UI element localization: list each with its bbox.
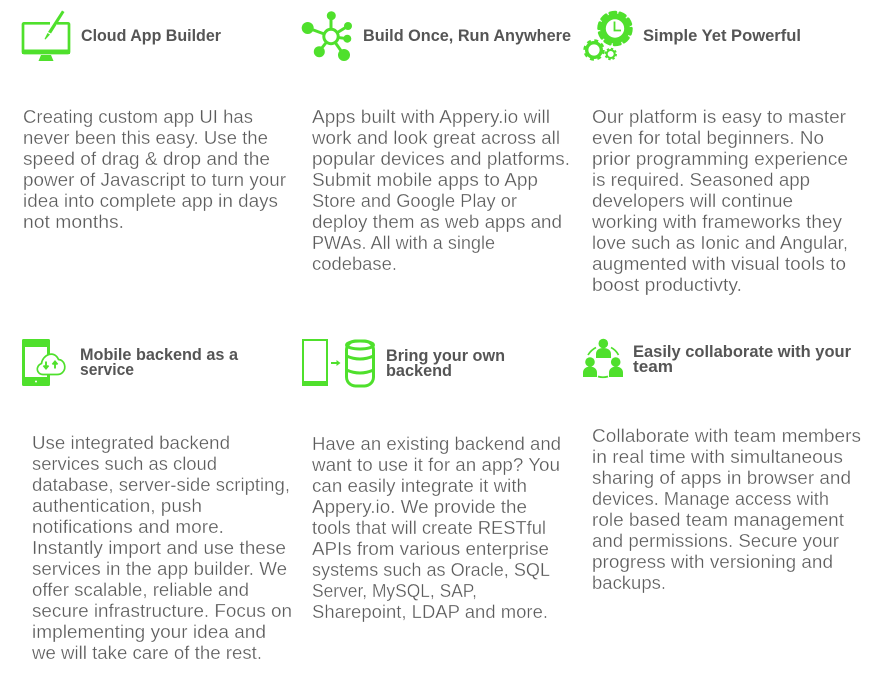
text: cloud app builder description: power of Javascript to turn your <box>23 169 286 190</box>
text: build once description: Submit mobile apps to App <box>312 169 538 190</box>
text: simple yet powerful description: boost productivty. <box>592 274 742 295</box>
text: collaborate description <box>592 425 861 593</box>
text: collaborate description: devices. Manage access with <box>592 488 829 509</box>
heading: Mobile backend as a service: Mobile backend as a <box>80 346 239 364</box>
heading: Mobile backend as a service: service <box>80 361 134 379</box>
text: mobile backend description: secure infrastructure. Focus on <box>32 600 292 621</box>
text: bring your own backend description: Server, MySQL, SAP, <box>312 580 477 601</box>
heading: Mobile backend as a service <box>80 346 239 379</box>
text: simple yet powerful description: augmented with visual tools to <box>592 253 846 274</box>
icon: network hub <box>302 11 352 61</box>
heading: Cloud App Builder: Cloud App Builder <box>81 27 222 45</box>
text: mobile backend description: Use integrated backend <box>32 432 230 453</box>
text: bring your own backend description: Sharepoint, LDAP and more. <box>312 601 548 622</box>
heading: Simple Yet Powerful: Simple Yet Powerful <box>643 27 801 45</box>
text: mobile backend description: notifications and more. <box>32 516 224 537</box>
text: bring your own backend description: can easily integrate it with <box>312 475 527 496</box>
text: collaborate description: backups. <box>592 572 666 593</box>
text: simple yet powerful description: is required. Seasoned app <box>592 169 810 190</box>
heading: Easily collaborate with your team: team <box>633 358 673 376</box>
text: collaborate description: in real time with simultaneous <box>592 446 843 467</box>
text: build once description: codebase. <box>312 253 397 274</box>
text: mobile backend description <box>31 432 292 663</box>
text: mobile backend description: services in the app builder. We <box>32 558 287 579</box>
text: cloud app builder description: speed of drag & drop and the <box>23 148 270 169</box>
text: build once description: Store and Google Play or <box>312 190 517 211</box>
heading: Easily collaborate with your team: Easily collaborate with your <box>633 343 852 361</box>
text: mobile backend description: Instantly import and use these <box>32 537 286 558</box>
heading: Easily collaborate with your team <box>633 343 852 376</box>
text: build once description: deploy them as web apps and <box>312 211 562 232</box>
text: build once description: popular devices and platforms. <box>312 148 570 169</box>
heading: Bring your own backend <box>386 347 505 380</box>
text: simple yet powerful description: love such as Ionic and Angular, <box>592 232 848 253</box>
text: collaborate description: Collaborate with team members <box>592 425 861 446</box>
text: cloud app builder description: Creating custom app UI has <box>23 106 253 127</box>
text: bring your own backend description: Appery.io. We provide the <box>312 496 527 517</box>
text: simple yet powerful description: working with frameworks they <box>591 211 843 232</box>
text: simple yet powerful description: prior programming experience <box>592 148 848 169</box>
text: bring your own backend description: systems such as Oracle, SQL <box>312 559 550 580</box>
text: simple yet powerful description: even for total beginners. No <box>592 127 824 148</box>
text: mobile backend description: implementing your idea and <box>32 621 266 642</box>
text: mobile backend description: services such as cloud <box>32 453 217 474</box>
text: mobile backend description: we will take care of the rest. <box>31 642 262 663</box>
text: mobile backend description: offer scalable, reliable and <box>32 579 249 600</box>
heading: Bring your own backend: Bring your own <box>386 347 505 365</box>
text: collaborate description: role based team management <box>592 509 844 530</box>
icon: phone with cloud <box>22 339 65 386</box>
text: build once description <box>311 106 570 274</box>
text: bring your own backend description <box>311 433 561 622</box>
text: mobile backend description: database, server-side scripting, <box>32 474 290 495</box>
text: cloud app builder description: never been this easy. Use the <box>23 127 268 148</box>
text: bring your own backend description: want to use it for an app? You <box>311 454 560 475</box>
text: cloud app builder description: not months. <box>23 211 124 232</box>
text: build once description: Apps built with Appery.io will <box>312 106 550 127</box>
text: cloud app builder description <box>23 106 286 232</box>
icon: phone to database <box>302 340 374 386</box>
text: build once description: work and look great across all <box>311 127 560 148</box>
text: bring your own backend description: tools that will create RESTful <box>312 517 546 538</box>
text: simple yet powerful description: developers will continue <box>592 190 793 211</box>
text: simple yet powerful description: Our platform is easy to master <box>592 106 846 127</box>
text: bring your own backend description: APIs from various enterprise <box>312 538 549 559</box>
text: build once description: PWAs. All with a single <box>312 232 495 253</box>
text: bring your own backend description: Have an existing backend and <box>312 433 561 454</box>
icon: gears with clock <box>584 12 631 60</box>
icon: monitor with pen <box>22 10 70 61</box>
text: simple yet powerful description <box>591 106 848 295</box>
icon: team of three <box>583 339 623 377</box>
heading: Bring your own backend: backend <box>386 362 452 380</box>
text: collaborate description: progress with versioning and <box>592 551 833 572</box>
text: mobile backend description: authentication, push <box>32 495 202 516</box>
text: cloud app builder description: idea into complete app in days <box>23 190 278 211</box>
text: collaborate description: and permissions. Secure your <box>592 530 839 551</box>
text: collaborate description: sharing of apps in browser and <box>592 467 851 488</box>
heading: Build Once, Run Anywhere: Build Once, Run Anywhere <box>363 27 571 45</box>
